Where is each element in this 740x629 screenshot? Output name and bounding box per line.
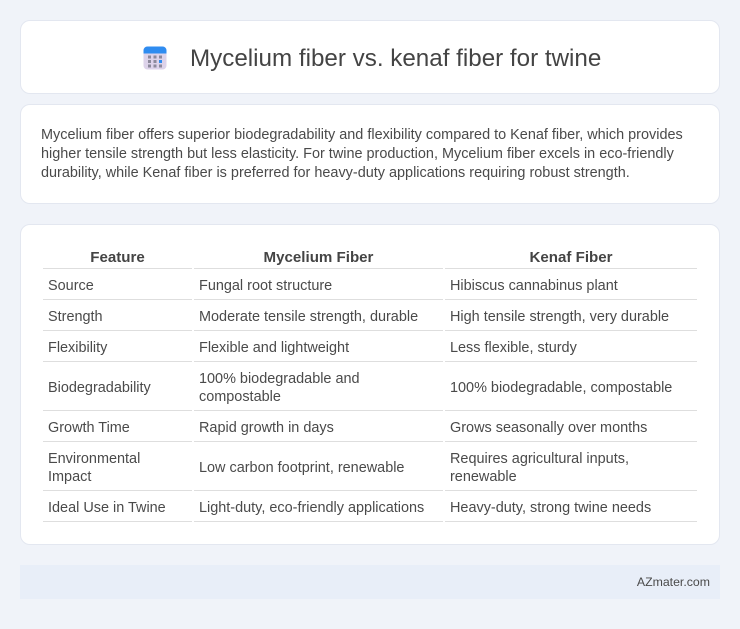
icon: calendar [144,46,166,70]
title card [20,20,720,94]
row: environmental impact [48,451,629,485]
row: growth time: Rapid growth in days [199,420,334,436]
row: biodegradability [48,371,672,405]
row: growth time: Grows seasonally over months [450,420,647,436]
row: source: Source [48,278,94,294]
row: environmental impact: Environmental [48,451,140,467]
row: biodegradability: 100% biodegradable, compostable [450,380,672,396]
row: environmental impact: Impact [48,469,91,485]
summary card [20,104,720,204]
table header: Feature [90,249,145,266]
row: environmental impact: Requires agricultural inputs, [450,451,629,467]
summary text: Mycelium fiber offers superior biodegradability and flexibility compared to Kenaf fiber, which provides [41,127,683,143]
row: biodegradability: compostable [199,389,281,405]
table header [90,249,613,266]
row: ideal use: Light-duty, eco-friendly applications [199,500,424,516]
footer credit: AZmater.com [637,575,710,589]
table header: Mycelium Fiber [264,249,373,266]
row: growth time [48,420,647,436]
row: biodegradability: 100% biodegradable and [199,371,360,387]
title: Mycelium fiber vs. kenaf fiber for twine [190,45,601,72]
summary text: durability, while Kenaf fiber is preferred for heavy-duty applications requiring robust strength. [41,165,630,181]
row: flexibility: Less flexible, sturdy [450,340,577,356]
row: environmental impact: renewable [450,469,517,485]
row: ideal use: Ideal Use in Twine [48,500,166,516]
comparison table [43,249,697,522]
row: biodegradability: Biodegradability [48,380,151,396]
row: flexibility: Flexibility [48,340,107,356]
row: strength: Moderate tensile strength, durable [199,309,418,325]
row: ideal use [48,500,651,516]
row: ideal use: Heavy-duty, strong twine needs [450,500,651,516]
row: source: Fungal root structure [199,278,332,294]
row: strength: High tensile strength, very durable [450,309,669,325]
row: flexibility [48,340,577,356]
row: flexibility: Flexible and lightweight [199,340,349,356]
table card [20,224,720,545]
summary text: higher tensile strength but less elasticity. For twine production, Mycelium fiber excels in eco-friendly [41,146,674,162]
summary text [41,127,683,181]
row: source: Hibiscus cannabinus plant [450,278,618,294]
row: growth time: Growth Time [48,420,130,436]
row: environmental impact: Low carbon footprint, renewable [199,460,404,476]
row: strength: Strength [48,309,103,325]
row: strength [48,309,669,325]
table header: Kenaf Fiber [529,249,613,266]
footer bar [20,565,720,599]
row: source [48,278,618,294]
